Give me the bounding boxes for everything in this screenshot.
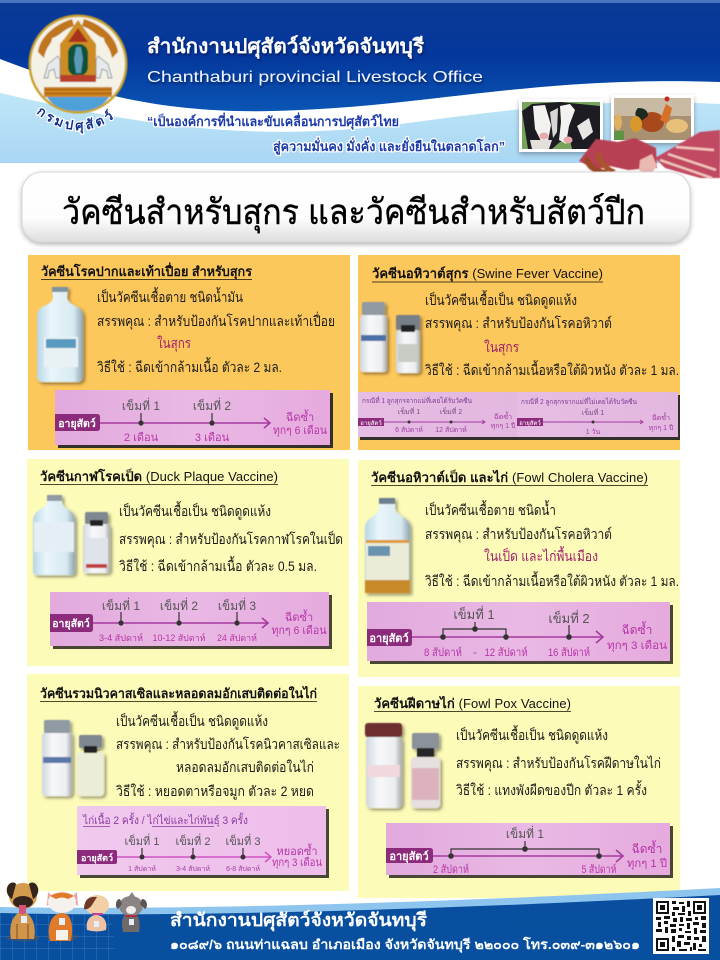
- schedule timelines: two cases: อายุสัตว์: [360, 419, 382, 427]
- schedule timelines: two cases: ทุกๆ 1 ปี: [649, 424, 674, 432]
- schedule timeline: 6-8 สัปดาห์: [226, 865, 260, 873]
- heading: วัคซีนฝีดาษไก่ (Fowl Pox Vaccine): [374, 695, 571, 711]
- schedule timeline: -: [473, 647, 477, 659]
- panel: combined Newcastle and infectious bronchitis vaccine: [27, 674, 349, 891]
- photo: raw meat: [579, 130, 720, 178]
- footer office name: สำนักงานปศุสัตว์จังหวัดจันทบุรี: [170, 909, 427, 932]
- photo: dairy cows: [519, 99, 603, 152]
- description: เป็นวัคซีนเชื้อเป็น ชนิดดูดแห้ง: [116, 711, 268, 730]
- schedule timeline: เข็มที่ 2: [548, 609, 590, 626]
- description: เป็นวัคซีนเชื้อตาย ชนิดน้ำมัน: [97, 287, 243, 305]
- schedule timeline: [386, 823, 673, 878]
- schedule timeline: ทุกๆ 6 เดือน: [272, 624, 327, 637]
- description: วิธีใช้ : ฉีดเข้ากล้ามเนื้อหรือใต้ผิวหนัง ตัวละ 1 มล.: [425, 360, 679, 378]
- vaccine vials: [365, 723, 440, 808]
- schedule timeline: 2 สัปดาห์: [433, 863, 469, 876]
- schedule timeline: [367, 602, 673, 664]
- schedule timeline: ทุกๆ 1 ปี: [627, 857, 667, 870]
- schedule timeline: ทุกๆ 3 เดือน: [272, 856, 322, 869]
- schedule timelines: two cases: เข็มที่ 1: [582, 408, 604, 417]
- schedule timelines: two cases: อายุสัตว์: [519, 419, 541, 427]
- description: วิธีใช้ : หยอดตาหรือจมูก ตัวละ 2 หยด: [116, 783, 314, 800]
- description: [97, 287, 335, 375]
- footer banner: [0, 888, 720, 960]
- schedule timeline: เข็มที่ 2: [160, 597, 198, 613]
- schedule timelines: two cases: กรณีที่ 1 ลูกสุกรจากแม่ที่เคยได้รับวัคซีน: [362, 396, 472, 405]
- schedule timelines: two cases: เข็มที่ 1: [398, 407, 420, 416]
- description: เป็นวัคซีนเชื้อตาย ชนิดน้ำ: [425, 500, 556, 518]
- description: หลอดลมอักเสบติดต่อในไก่: [176, 759, 314, 775]
- schedule timeline: อายุสัตว์: [58, 417, 96, 431]
- schedule timeline: ทุกๆ 6 เดือน: [273, 424, 327, 437]
- panel: fowl pox vaccine: [358, 686, 680, 898]
- icon: orange cat mascot: [46, 891, 78, 941]
- schedule timeline: ฉีดซ้ำ: [632, 840, 662, 856]
- photo: chickens: [611, 95, 694, 143]
- schedule timeline: [77, 806, 329, 878]
- schedule timelines: two cases: กรณีที่ 2 ลูกสุกรจากแม่ที่ไม่เคยได้รับวัคซีน: [521, 397, 637, 406]
- schedule timeline: 8 สัปดาห์: [424, 646, 462, 659]
- footer address: ๑๐๘๙/๖ ถนนท่าแฉลบ อำเภอเมือง จังหวัดจันทบุรี ๒๒๐๐๐ โทร.๐๓๙-๓๑๒๖๐๑: [170, 936, 640, 953]
- schedule timeline: อายุสัตว์: [389, 850, 429, 864]
- slogan: สู่ความมั่นคง มั่งคั่ง และยั่งยืนในตลาดโลก”: [273, 137, 505, 155]
- schedule timelines: two cases: 1 วัน: [586, 428, 600, 436]
- schedule timeline: ฉีดซ้ำ: [622, 621, 652, 637]
- schedule timeline: ทุกๆ 3 เดือน: [607, 639, 667, 652]
- description: สรรพคุณ : สำหรับป้องกันโรคฝีดาษในไก่: [456, 755, 661, 772]
- schedule timeline: เข็มที่ 1: [102, 597, 140, 613]
- title: วัคซีนสำหรับสุกร และวัคซีนสำหรับสัตว์ปีก: [62, 193, 645, 233]
- vaccine vials: [42, 720, 104, 796]
- vaccine bottle: [37, 287, 83, 382]
- slogan: “เป็นองค์การที่นำและขับเคลื่อนการปศุสัตว์ไทย: [147, 112, 399, 130]
- schedule timeline: 1 สัปดาห์: [128, 865, 156, 873]
- schedule timeline: [50, 592, 332, 649]
- schedule timelines: two cases: 6 สัปดาห์: [395, 426, 423, 434]
- vaccine vials: [360, 302, 420, 373]
- schedule timeline: 10-12 สัปดาห์: [152, 632, 206, 643]
- vaccine bottles: [33, 495, 110, 575]
- schedule timeline: 3-4 สัปดาห์: [176, 865, 210, 873]
- description: [116, 711, 340, 800]
- heading: วัคซีนอหิวาต์เป็ด และไก่ (Fowl Cholera Vaccine): [371, 468, 648, 485]
- schedule timeline: ไก่เนื้อ 2 ครั้ง / ไก่ไข่และไก่พันธุ์ 3 ครั้ง: [82, 812, 248, 827]
- schedule timeline: อายุสัตว์: [369, 632, 409, 646]
- panel: swine fever vaccine: [358, 255, 680, 450]
- heading: วัคซีนโรคปากและเท้าเปื่อย สำหรับสุกร: [41, 262, 252, 280]
- schedule timeline: 3-4 สัปดาห์: [99, 632, 143, 643]
- description: [119, 501, 343, 574]
- description: วิธีใช้ : แทงพังผืดของปีก ตัวละ 1 ครั้ง: [456, 780, 647, 798]
- description: เป็นวัคซีนเชื้อเป็น ชนิดดูดแห้ง: [119, 501, 271, 520]
- schedule timeline: อายุสัตว์: [81, 852, 113, 864]
- description: วิธีใช้ : ฉีดเข้ากล้ามเนื้อ ตัวละ 2 มล.: [97, 357, 282, 375]
- description: [456, 725, 661, 798]
- schedule timelines: two cases: เข็มที่ 2: [440, 407, 462, 416]
- description: เป็นวัคซีนเชื้อเป็น ชนิดดูดแห้ง: [456, 725, 608, 744]
- schedule timeline: [55, 390, 333, 448]
- description: วิธีใช้ : ฉีดเข้ากล้ามเนื้อหรือใต้ผิวหนัง ตัวละ 1 มล.: [425, 571, 679, 589]
- office name Thai: สำนักงานปศุสัตว์จังหวัดจันทบุรี: [147, 35, 424, 59]
- schedule timeline: หยอดซ้ำ: [276, 843, 318, 858]
- schedule timelines: two cases: ฉีดซ้ำ: [652, 411, 670, 422]
- logo caption: กรมปศุสัตว์: [35, 107, 114, 135]
- schedule timeline: ฉีดซ้ำ: [286, 409, 314, 424]
- description: เป็นวัคซีนเชื้อเป็น ชนิดดูดแห้ง: [425, 290, 577, 309]
- schedule timeline: ฉีดซ้ำ: [285, 609, 313, 624]
- schedule timeline: เข็มที่ 1: [453, 605, 495, 622]
- schedule timeline: เข็มที่ 3: [226, 833, 260, 848]
- heading: วัคซีนกาฬโรคเป็ด (Duck Plaque Vaccine): [40, 467, 278, 484]
- schedule timeline: เข็มที่ 2: [176, 833, 210, 848]
- vaccine bottle: [365, 498, 410, 593]
- panel: foot and mouth vaccine for swine: [28, 255, 350, 450]
- schedule timelines: two cases: ทุกๆ 1 ปี: [491, 422, 516, 430]
- schedule timeline: 16 สัปดาห์: [548, 646, 590, 659]
- description: สรรพคุณ : สำหรับป้องกันโรคนิวคาสเซิลและ: [116, 736, 340, 753]
- title panel: [22, 172, 690, 242]
- schedule timeline: 5 สัปดาห์: [582, 863, 616, 876]
- schedule timeline: เข็มที่ 1: [122, 397, 160, 413]
- description: สรรพคุณ : สำหรับป้องกันโรคปากและเท้าเปื่อย: [97, 312, 335, 330]
- schedule timeline: 3 เดือน: [195, 431, 230, 444]
- description: วิธีใช้ : ฉีดเข้ากล้ามเนื้อ ตัวละ 0.5 มล.: [119, 556, 317, 574]
- panel: duck plague vaccine: [27, 459, 349, 666]
- description: ในสุกร: [157, 335, 191, 352]
- heading: วัคซีนอหิวาต์สุกร (Swine Fever Vaccine): [372, 266, 603, 282]
- logo: department seal: [28, 14, 128, 114]
- schedule timeline: 12 สัปดาห์: [484, 646, 528, 659]
- icon: cream puppy mascot: [84, 895, 109, 932]
- schedule timeline: 24 สัปดาห์: [217, 632, 257, 643]
- office name English: Chanthaburi provincial Livestock Office: [147, 69, 483, 86]
- slogan: [147, 112, 505, 155]
- schedule timeline: เข็มที่ 1: [506, 825, 544, 841]
- QR code: [653, 898, 709, 954]
- description: ในเป็ด และไก่พื้นเมือง: [484, 546, 598, 564]
- description: ในสุกร: [484, 339, 519, 356]
- schedule timeline: เข็มที่ 3: [218, 597, 256, 613]
- description: [425, 500, 679, 589]
- panel: fowl cholera vaccine: [358, 460, 680, 677]
- description: สรรพคุณ : สำหรับป้องกันโรคอหิวาต์: [425, 526, 612, 543]
- header banner: [0, 0, 720, 180]
- schedule timelines: two cases: [358, 392, 680, 440]
- icon: brown dog mascot: [6, 883, 40, 942]
- schedule timeline: 2 เดือน: [124, 431, 159, 444]
- schedule timelines: two cases: 12 สัปดาห์: [435, 426, 467, 434]
- schedule timelines: two cases: ฉีดซ้ำ: [494, 410, 512, 421]
- icon: grey dog mascot: [116, 892, 147, 932]
- description: สรรพคุณ : สำหรับป้องกันโรคอหิวาต์: [425, 315, 612, 332]
- schedule timeline: เข็มที่ 1: [125, 833, 159, 848]
- schedule timeline: อายุสัตว์: [52, 617, 90, 631]
- heading: วัคซีนรวมนิวคาสเซิลและหลอดลมอักเสบติดต่อในไก่: [40, 685, 317, 701]
- description: สรรพคุณ : สำหรับป้องกันโรคกาฬโรคในเป็ด: [119, 530, 343, 548]
- schedule timeline: เข็มที่ 2: [193, 397, 231, 413]
- description: [425, 290, 679, 378]
